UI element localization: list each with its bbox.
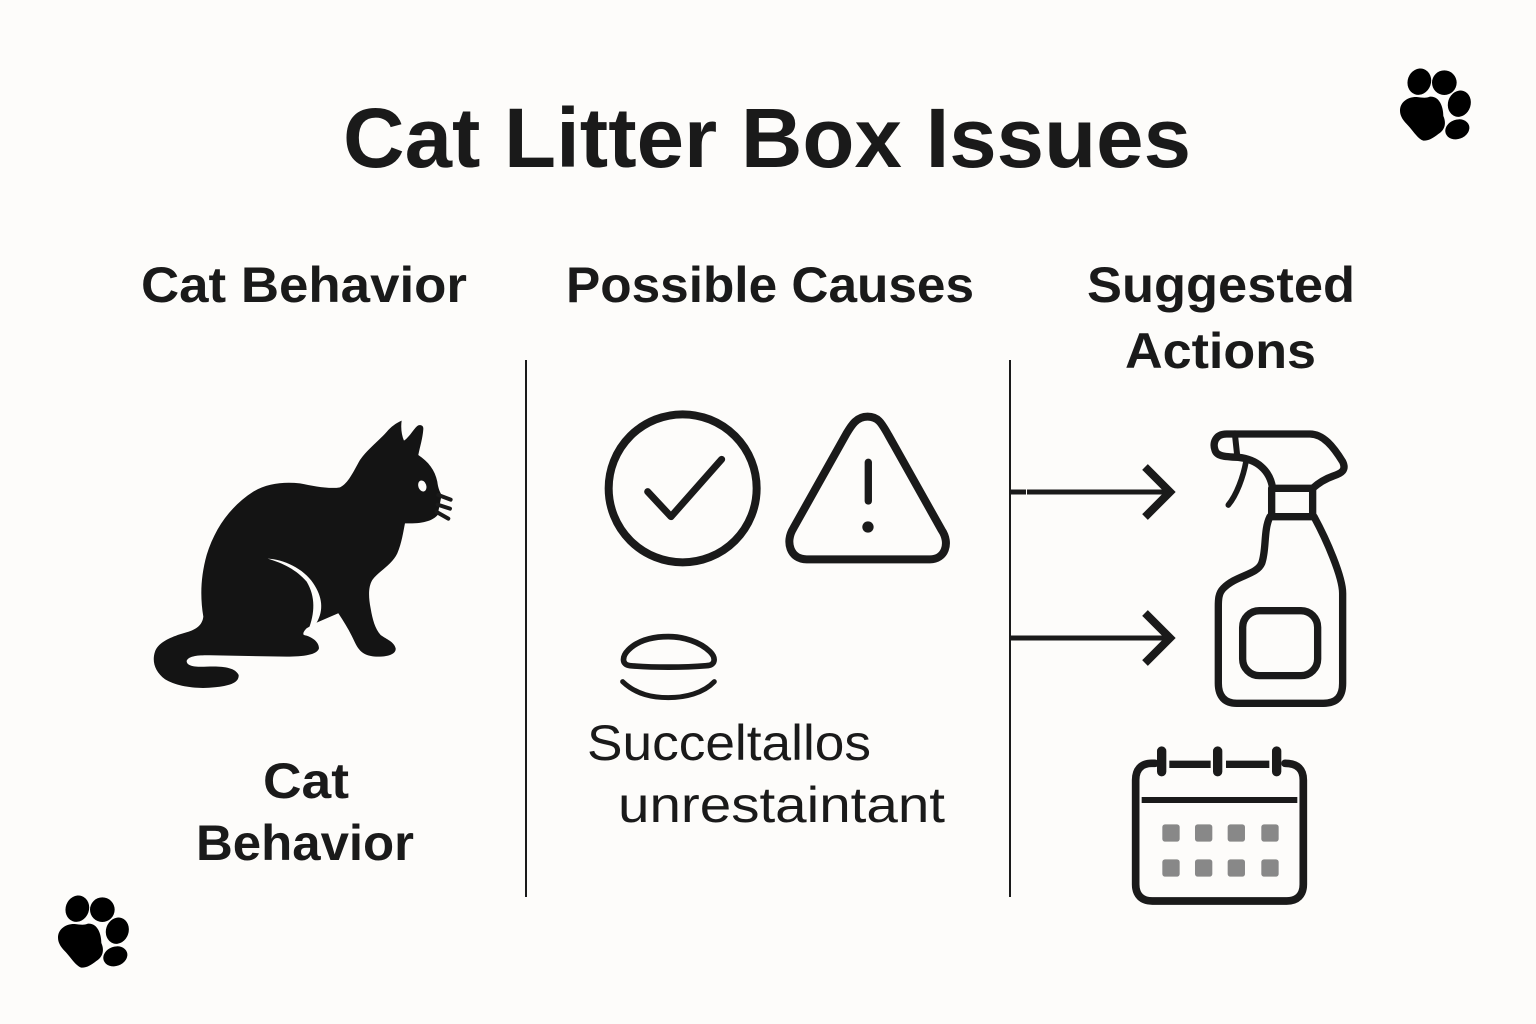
- heading: Possible Causes: Possible Causes: [566, 257, 974, 313]
- icon: paw print top right: [1400, 65, 1474, 143]
- icon: check mark in circle: [609, 414, 757, 562]
- icon: calendar: [1136, 751, 1303, 901]
- label: Cat Behavior under cat: [196, 753, 414, 871]
- icon: litter dish: [623, 637, 714, 698]
- icon: paw print bottom left: [58, 892, 132, 970]
- icon: spray bottle: [1214, 434, 1344, 703]
- text: causes label: unrestaintant: [618, 777, 945, 833]
- heading: Cat Behavior: Cat Behavior: [141, 257, 467, 313]
- label: Cat Behavior under cat: Behavior: [196, 815, 414, 871]
- icon: warning triangle: [789, 417, 946, 559]
- heading: Suggested Actions: Suggested: [1087, 257, 1355, 313]
- arrow: bottom: [1011, 613, 1170, 663]
- heading: Suggested Actions: Actions: [1125, 323, 1316, 379]
- text: causes label: [587, 715, 945, 833]
- column divider left: [525, 360, 527, 897]
- heading: Suggested Actions: [1087, 257, 1355, 379]
- column divider right: [1009, 360, 1011, 897]
- icon: sitting cat silhouette: [154, 421, 451, 688]
- title: Cat Litter Box Issues: [343, 91, 1191, 185]
- arrow: top: [1011, 467, 1170, 517]
- label: Cat Behavior under cat: Cat: [263, 753, 349, 809]
- text: causes label: Succeltallos: [587, 715, 871, 771]
